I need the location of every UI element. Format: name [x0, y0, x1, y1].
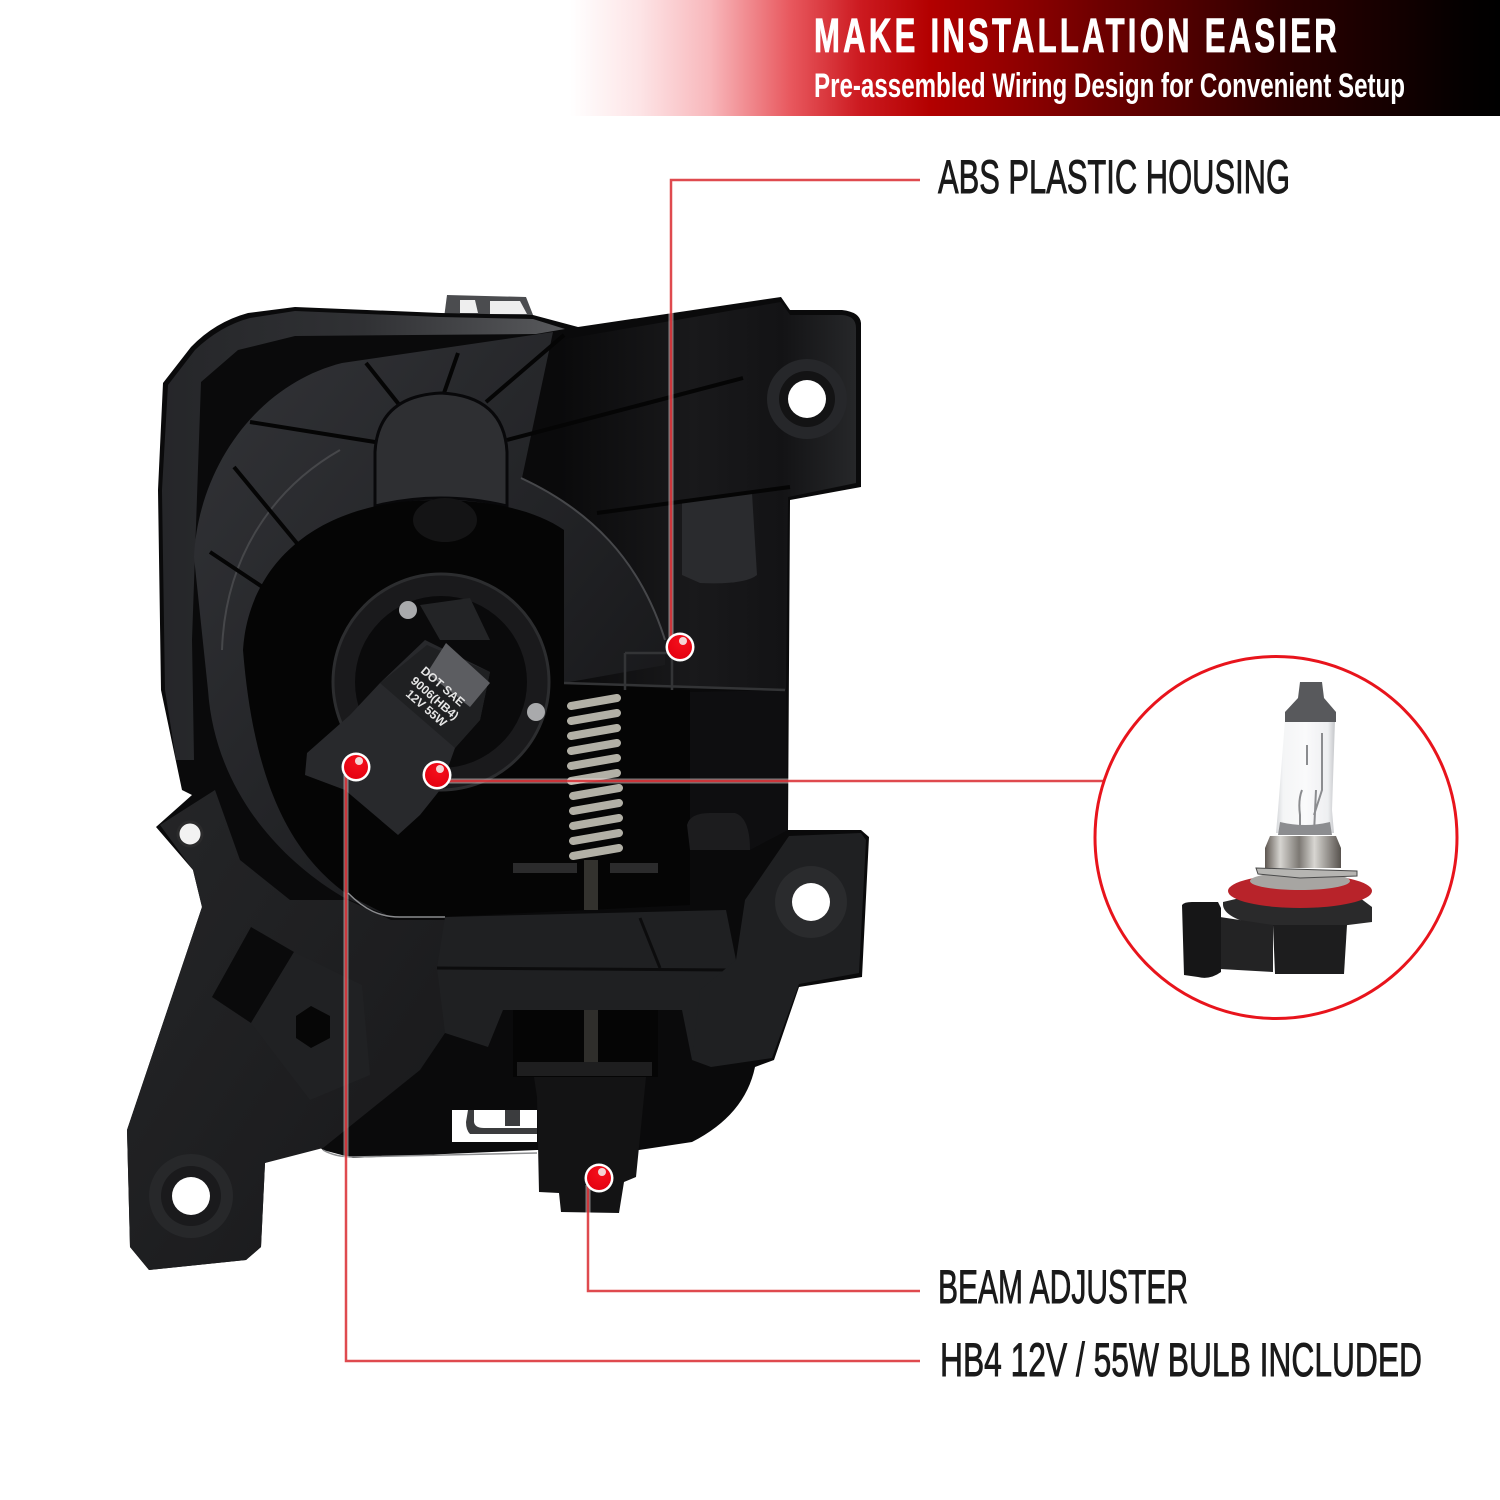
flange ring: [1223, 898, 1372, 926]
shelf lines: [564, 653, 785, 690]
bottom connector: [534, 1077, 646, 1213]
lower screw recess: [513, 1010, 658, 1077]
seal inner chrome: [1250, 872, 1350, 890]
arm diamond recess: [212, 927, 294, 1023]
lower right dark area: [690, 690, 788, 850]
arm bright edge: [348, 893, 445, 917]
connector neck: [1220, 917, 1273, 972]
top metal clip: [444, 295, 535, 320]
bulb label text: DOT SAE: [418, 664, 467, 709]
callout: beam adjuster: [584, 1164, 1188, 1313]
fog light housing: [127, 295, 869, 1270]
left lower arm: [127, 790, 445, 1270]
callout: abs plastic housing: ABS PLASTIC HOUSING: [938, 150, 1290, 203]
hex hole: [296, 1006, 330, 1048]
bulb glass: [1276, 720, 1335, 833]
mounting holes: [149, 380, 847, 1238]
callout: abs plastic housing: [666, 150, 1290, 662]
callout: hb4 bulb included: [342, 752, 1422, 1386]
connector plug: [1182, 902, 1221, 978]
small block: [687, 813, 750, 850]
clip ring: [1256, 868, 1357, 878]
bulb filament: [1299, 733, 1322, 833]
bulb tip: [1285, 682, 1336, 722]
header band: [570, 0, 1500, 116]
dome cap: [375, 393, 507, 506]
callout: bulb inset link: [422, 760, 1103, 790]
top rim strip: [162, 311, 565, 760]
housing silhouette: [127, 297, 869, 1270]
bulb metal collar: [1265, 836, 1341, 868]
flange boss top: [767, 359, 847, 439]
ring panel: [194, 332, 665, 917]
ring band arc: [222, 450, 665, 650]
bulb socket ring: [333, 574, 549, 790]
arm raised face: [251, 952, 370, 1100]
installed bulb base: 12V 55W: [403, 687, 450, 730]
callout: beam adjuster: BEAM ADJUSTER: [938, 1260, 1188, 1313]
cavity inner dimple: [413, 498, 477, 542]
installed bulb base: 9006(HB4): [408, 674, 462, 723]
bottom edge highlight: [323, 1150, 537, 1157]
radial ribs: [210, 335, 790, 590]
base housing: [1273, 925, 1347, 974]
lower body block: [437, 910, 736, 1060]
recessed box: [682, 493, 757, 583]
red seal: [1228, 874, 1372, 908]
inset circle: replacement bulb: [1095, 656, 1457, 1018]
lower right flange: [692, 833, 866, 1067]
right housing panel: [560, 302, 856, 690]
bottom clip window: [452, 1110, 537, 1142]
bulb cavity: [243, 500, 690, 917]
adjuster spring: [513, 698, 658, 910]
filament base: [1278, 822, 1332, 835]
block ledge: [437, 918, 731, 970]
installed bulb base: [305, 640, 490, 835]
